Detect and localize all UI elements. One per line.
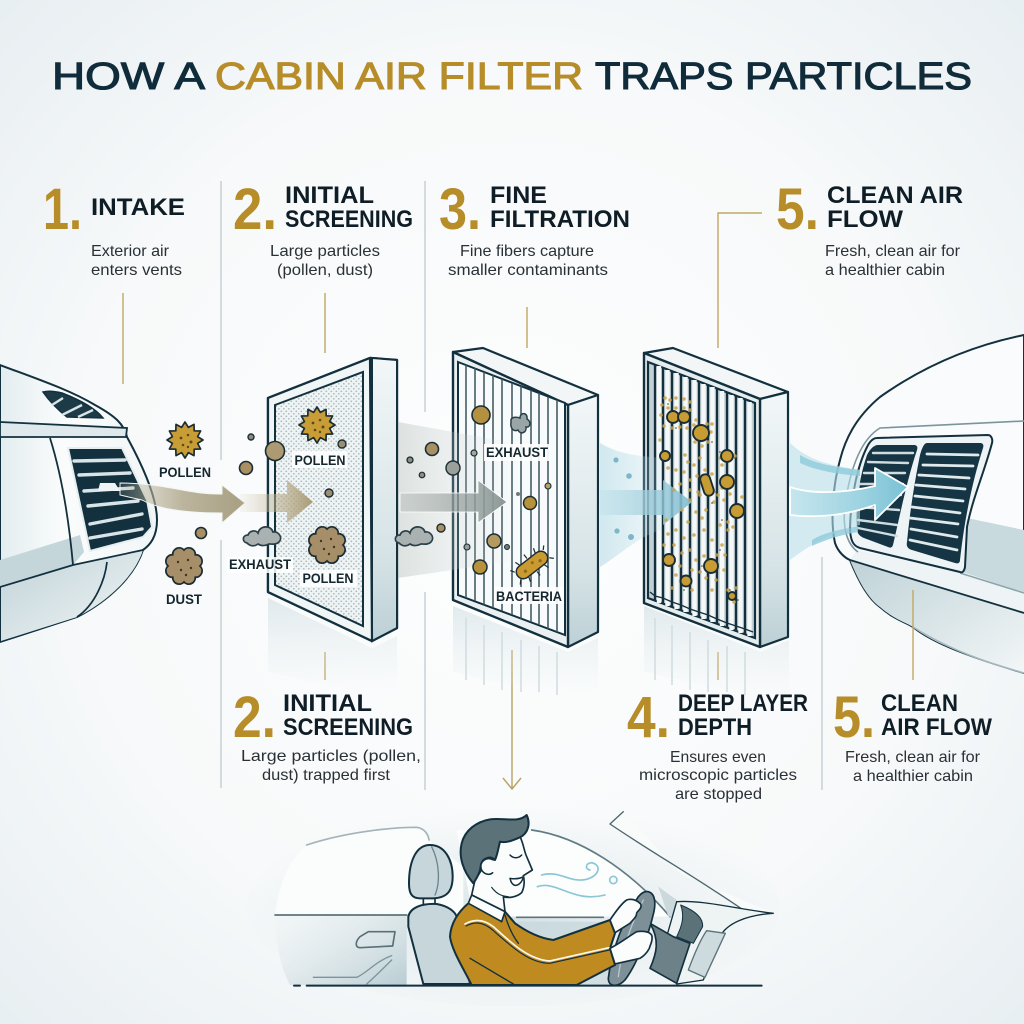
step 4: deep layer depth: Ensures even [670,749,766,766]
step 5: clean air flow (bottom): Fresh, clean air for [845,749,981,766]
filter 1: initial screening [268,358,397,695]
floor line [294,983,762,989]
title: CABIN AIR FILTER [215,56,583,98]
step 2: initial screening (bottom): dust) trapped first [262,767,391,784]
step 1: intake: 1. [43,177,82,242]
left dashboard vent [0,365,157,642]
filter 2: fine filtration [453,348,598,698]
gold leader over right vent [912,590,914,680]
step 4: deep layer depth: microscopic particles [639,767,797,784]
arrow 1: intake air [120,483,245,523]
step 5: clean air flow (top) [776,177,963,279]
step 2: initial screening (top): INITIAL [285,182,374,209]
particles: on filter 1 [292,407,357,587]
steering wheel [608,892,655,985]
step 5: clean air flow (bottom) [833,685,992,785]
step 5: clean air flow (bottom): AIR FLOW [881,714,992,741]
step 2: initial screening (top): Large particles [270,243,380,260]
step 4: deep layer depth: DEPTH [678,714,752,741]
step 2: initial screening (top): 2. [233,177,277,242]
cabin shading [247,807,780,1007]
filter 3: deep layer [644,348,789,698]
step 3: fine filtration: Fine fibers capture [460,243,594,260]
arrow 3: gray air through filter 2 [398,422,520,578]
step 2: initial screening (bottom) [233,685,421,784]
step 3: fine filtration [439,177,630,279]
step 1: intake: INTAKE [91,194,185,221]
gray column dividers [221,181,822,790]
step 5: clean air flow (bottom): CLEAN [881,690,958,717]
hands [610,899,641,933]
particles: intake side [159,422,293,607]
particles: intake side: DUST [166,592,203,607]
step 2: initial screening (top) [233,177,413,279]
title: HOW A [52,56,206,98]
particles: on filter 1: POLLEN [294,453,346,468]
step 5: clean air flow (top): Fresh, clean air for [825,243,961,260]
step 4: deep layer depth: 4. [627,685,670,750]
step 1: intake: enters vents [91,262,182,279]
icon: bacteria [507,542,557,588]
breeze [537,863,617,897]
arrow 2: through filter 1 [240,480,313,523]
door panel [275,915,407,985]
dashboard [667,901,773,984]
step 5: clean air flow (top): FLOW [827,206,903,233]
step 2: initial screening (top): (pollen, dust) [277,262,373,279]
step 1: intake: Exterior air [91,243,170,260]
head [472,837,532,912]
right dashboard vent [833,335,1024,673]
windshield and pillar [457,830,670,917]
arrow 4: blue air through filter 3 [600,443,692,567]
step 4: deep layer depth: DEEP LAYER [678,690,808,717]
step 5: clean air flow (top): a healthier cabin [825,262,945,279]
step 5: clean air flow (bottom): a healthier cabin [853,768,973,785]
gold leader lines [123,213,762,680]
face details [510,855,522,858]
title [52,56,972,98]
step 3: fine filtration: FINE [490,182,547,209]
title: TRAPS PARTICLES [595,56,972,98]
arrow 5: clean air into vent [790,443,908,560]
seat [409,845,453,898]
step 3: fine filtration: smaller contaminants [448,262,608,279]
particles: on filter 2 [395,406,564,604]
step 3: fine filtration: FILTRATION [490,206,630,233]
trapped particles on filter 3 [660,398,744,602]
hair [461,815,529,883]
step 4: deep layer depth [627,685,808,803]
step 2: initial screening (bottom): INITIAL [283,690,372,717]
particles: intake side: POLLEN [159,465,211,480]
collar [468,895,505,922]
step 3: fine filtration: 3. [439,177,481,242]
arrow: down to driver [503,650,521,789]
step 2: initial screening (top): SCREENING [285,206,413,233]
step 2: initial screening (bottom): SCREENING [283,714,413,741]
particles: on filter 1: POLLEN [302,571,354,586]
step 5: clean air flow (bottom): 5. [833,685,875,750]
side window [275,827,463,915]
step 2: initial screening (bottom): Large particles (pollen, [241,748,421,765]
step 4: deep layer depth: are stopped [675,786,762,803]
step 2: initial screening (bottom): 2. [233,685,276,750]
step 5: clean air flow (top): CLEAN AIR [827,182,963,209]
particles: on filter 2: EXHAUST [486,445,549,460]
legs [650,923,690,983]
driver scene [247,807,780,1007]
ear [481,859,493,874]
particles: on filter 2: BACTERIA [496,589,562,604]
particles: intake side: EXHAUST [229,557,292,572]
step 5: clean air flow (top): 5. [776,177,819,242]
step 1: intake [43,177,185,279]
torso and arms [450,903,615,985]
